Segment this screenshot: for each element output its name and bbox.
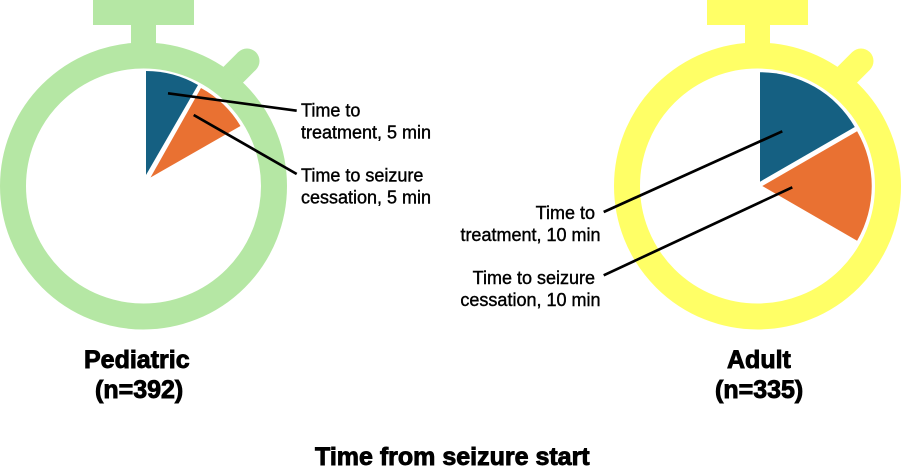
icon: yellow stopwatch — [627, 0, 888, 316]
label: time to seizure cessation: cessation, 5 min — [301, 188, 431, 208]
panel: pediatric stopwatch — [13, 0, 431, 404]
label: time to treatment: Time to — [536, 203, 595, 223]
label: time to seizure cessation: Time to seizure — [473, 268, 595, 288]
leader line: treatment — [604, 131, 782, 212]
label: time to treatment: Time to — [301, 100, 360, 120]
label: time to seizure cessation: cessation, 10 min — [460, 290, 600, 310]
wedge: time to seizure cessation — [150, 88, 240, 178]
heading: adult: (n=335) — [715, 376, 803, 404]
icon: green stopwatch — [13, 0, 274, 316]
wedge: time to treatment — [760, 72, 855, 182]
label: time to treatment: treatment, 5 min — [301, 122, 431, 142]
leader line: seizure cessation — [194, 115, 297, 174]
leader line: seizure cessation — [604, 187, 792, 275]
wedge: time to treatment — [146, 71, 198, 175]
heading: adult: Adult — [727, 346, 792, 374]
panel: adult stopwatch — [460, 0, 888, 404]
label: time to treatment: treatment, 10 min — [460, 225, 600, 245]
leader line: treatment — [168, 93, 297, 111]
heading: pediatric: (n=392) — [95, 376, 183, 404]
label: time to seizure cessation: Time to seizure — [301, 166, 423, 186]
wedge: time to seizure cessation — [762, 131, 872, 241]
heading: pediatric: Pediatric — [84, 346, 190, 374]
